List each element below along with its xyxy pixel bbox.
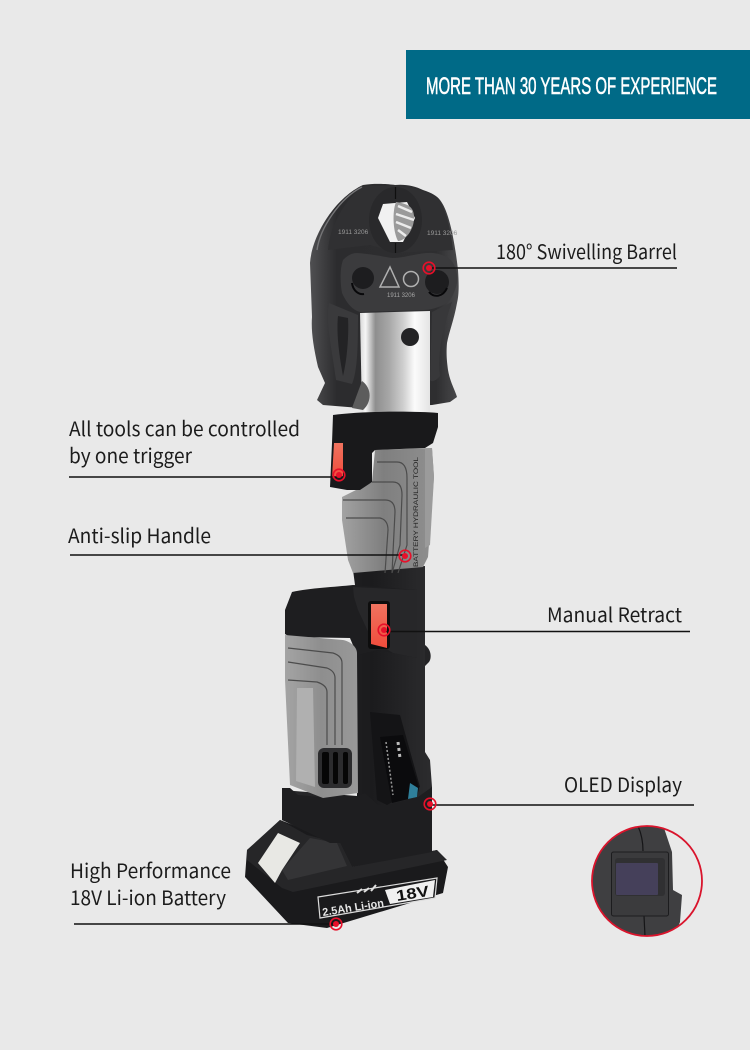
upper body cover bbox=[285, 585, 417, 658]
right bump bbox=[425, 645, 431, 666]
manual retract button bbox=[368, 601, 390, 649]
handle grip: BATTERY HYDRAULIC TOOL bbox=[414, 456, 420, 567]
handle grip bbox=[342, 448, 434, 573]
link plate: 1911 3206 bbox=[387, 293, 416, 299]
info label on body bbox=[370, 712, 420, 805]
callout: battery bbox=[70, 855, 342, 930]
trigger bbox=[332, 443, 343, 478]
battery release clip bbox=[258, 833, 300, 883]
OLED inset bbox=[591, 825, 703, 937]
callout: trigger: All tools can be controlled bbox=[69, 413, 300, 442]
battery label: 18V bbox=[395, 883, 430, 905]
neck and main body bbox=[282, 566, 432, 867]
infographic canvas bbox=[68, 50, 750, 937]
callout: manual retract: Manual Retract bbox=[547, 599, 682, 628]
battery label: 2.5Ah Li-ion bbox=[322, 897, 385, 919]
collar and trigger guard bbox=[330, 412, 438, 490]
callout: trigger: by one trigger bbox=[69, 440, 192, 469]
callout: OLED display: OLED Display bbox=[564, 769, 683, 798]
base highlights bbox=[282, 787, 432, 867]
die opening bbox=[369, 187, 422, 253]
jaw bbox=[310, 184, 459, 408]
link plate bbox=[341, 253, 457, 312]
battery bbox=[245, 820, 448, 928]
callout: battery: 18V Li-ion Battery bbox=[70, 882, 227, 911]
callout: manual retract bbox=[378, 599, 690, 636]
callout: 180 swivelling barrel: 180° Swivelling Barrel bbox=[496, 236, 677, 265]
grip vent bbox=[318, 748, 352, 788]
callout: anti-slip handle bbox=[68, 520, 411, 562]
grey side grip bbox=[285, 635, 358, 798]
callout: trigger bbox=[69, 413, 345, 481]
barrel bbox=[352, 311, 430, 414]
jaw: 1911 3206 bbox=[338, 229, 369, 236]
banner bbox=[406, 50, 750, 119]
tool illustration bbox=[245, 184, 459, 928]
callout: anti-slip handle: Anti-slip Handle bbox=[68, 520, 211, 549]
battery label bbox=[318, 878, 437, 919]
callout: OLED display bbox=[424, 769, 694, 810]
jaw: 1911 3206 bbox=[427, 230, 458, 237]
callout: battery: High Performance bbox=[70, 855, 231, 884]
callout: 180 swivelling barrel bbox=[423, 236, 677, 274]
